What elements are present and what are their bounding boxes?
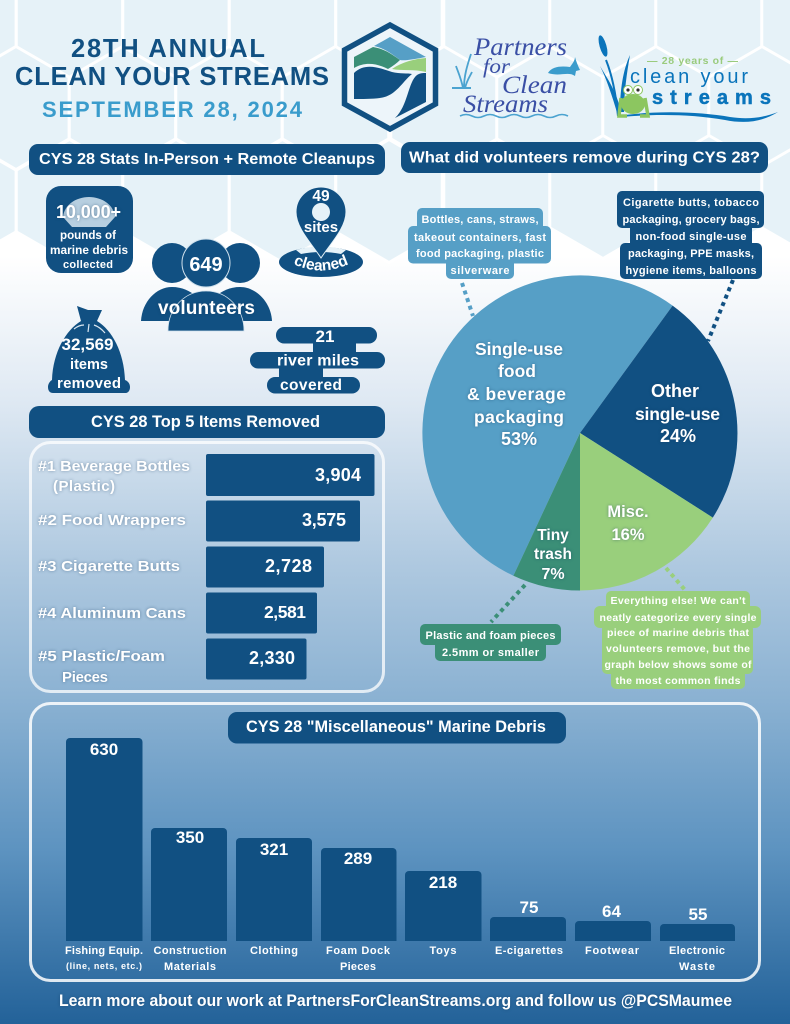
- slice: miscellaneous: [580, 433, 713, 590]
- slice: tiny trash: [513, 433, 580, 590]
- callout: single-use food examples: silverware: [450, 265, 510, 277]
- hexagon background pattern: [0, 0, 790, 262]
- callout: other single-use examples: non-food single-use: [636, 231, 746, 243]
- bar: toys: [405, 871, 482, 957]
- bar: cigarette butts: 2,728: [265, 556, 312, 576]
- logo: 28 years of Clean Your Streams: [597, 34, 778, 122]
- stat: 649 volunteers: [141, 239, 272, 331]
- bar: food wrappers: #2 Food Wrappers: [38, 512, 186, 529]
- bar: footwear: Footwear: [585, 945, 640, 957]
- bar: e-cigarettes: E-cigarettes: [495, 945, 563, 957]
- pie labels: trash: [534, 546, 572, 563]
- bar: foam dock pieces: Foam Dock: [326, 945, 391, 957]
- slice: other single-use: [580, 306, 737, 518]
- bar: clothing: [236, 838, 312, 957]
- pie labels: 53%: [501, 429, 537, 449]
- bar: cigarette butts: [38, 546, 324, 588]
- bar: clothing: 321: [260, 840, 288, 859]
- bar: beverage bottles: #1 Beverage Bottles: [38, 458, 190, 475]
- bar: plastic foam pieces: 2,330: [249, 648, 295, 668]
- stat: 21 river miles covered: 21: [316, 327, 334, 346]
- pie labels: Other: [651, 381, 699, 401]
- callout: single-use food examples: takeout containers, fast: [414, 232, 546, 244]
- callout: single-use food examples: [408, 208, 551, 316]
- title: [15, 35, 329, 122]
- slice: single-use food and beverage packaging: [422, 275, 673, 576]
- callout: single-use food examples: food packaging, plastic: [416, 248, 544, 260]
- icon: hexagon watershed logo: [344, 25, 436, 129]
- stat: 49 sites cleaned: 49: [312, 188, 330, 205]
- callout: miscellaneous description: piece of marine debris that: [607, 627, 750, 639]
- callout: miscellaneous description: [594, 568, 761, 689]
- pie labels: single-use: [635, 404, 720, 424]
- bar: e-cigarettes: [490, 898, 566, 957]
- stat: 21 river miles covered: river miles: [277, 352, 359, 370]
- bar: electronic waste: 55: [689, 905, 707, 924]
- bar: fishing equipment: Fishing Equip.: [65, 945, 143, 957]
- panel: miscellaneous marine debris chart: [30, 704, 760, 980]
- callout: other single-use examples: packaging, grocery bags,: [622, 214, 760, 226]
- bar: clothing: Clothing: [250, 945, 298, 957]
- pie labels: Tiny: [537, 527, 569, 544]
- panel: top 5 bar chart: [30, 442, 384, 692]
- pie labels: [467, 339, 720, 583]
- pie labels: Single-use: [475, 339, 563, 359]
- bar: toys: Toys: [430, 945, 456, 957]
- stat: 21 river miles covered: [250, 327, 385, 394]
- callout: other single-use examples: Cigarette butts, tobacco: [623, 197, 759, 209]
- callout: miscellaneous description: neatly categorize every single: [600, 612, 757, 624]
- bar: aluminum cans: #4 Aluminum Cans: [38, 605, 186, 622]
- bar: fishing equipment: [65, 738, 143, 971]
- logo: 28 years of Clean Your Streams: — 28 years of —: [647, 55, 738, 67]
- stat: 21 river miles covered: covered: [280, 377, 342, 394]
- bar: foam dock pieces: [321, 848, 396, 973]
- callout: single-use food examples: Bottles, cans, straws,: [422, 214, 538, 226]
- logo: Partners for Clean Streams: [452, 34, 580, 118]
- bar: food wrappers: 3,575: [302, 510, 346, 530]
- bar: beverage bottles: 3,904: [315, 465, 361, 485]
- logo: 28 years of Clean Your Streams: clean your: [630, 66, 748, 88]
- callout: miscellaneous description: graph below shows some of: [604, 659, 752, 671]
- callout: miscellaneous description: Everything else! We can't: [610, 595, 746, 607]
- heading: miscellaneous marine debris: CYS 28 "Miscellaneous" Marine Debris: [246, 718, 546, 736]
- stat: 10,000+ pounds: marine debris: [50, 243, 128, 257]
- bar: plastic foam pieces: [38, 638, 306, 686]
- stat: 649 volunteers: volunteers: [158, 298, 255, 319]
- callout: other single-use examples: hygiene items, balloons: [626, 265, 756, 277]
- bar: construction materials: Construction: [154, 945, 227, 957]
- heading: stats: [29, 144, 385, 175]
- title: 28TH ANNUAL: [71, 35, 265, 63]
- stat: 32,569 items removed: [48, 306, 130, 393]
- heading: stats: CYS 28 Stats In-Person + Remote Cleanups: [39, 151, 375, 168]
- bar: plastic foam pieces: Pieces: [62, 669, 108, 686]
- bar: construction materials: [151, 828, 227, 973]
- callout: other single-use examples: packaging, PPE masks,: [628, 248, 754, 260]
- footer: Learn more about our work at PartnersForCleanStreams.org and follow us @PCSMaumee: [59, 992, 732, 1010]
- title: SEPTEMBER 28, 2024: [42, 97, 303, 122]
- pie labels: food: [498, 361, 536, 381]
- stat: 49 sites cleaned: cleaned: [294, 254, 348, 271]
- bar: electronic waste: Electronic: [669, 945, 725, 957]
- callout: tiny trash description: Plastic and foam pieces: [426, 630, 556, 642]
- bar: plastic foam pieces: #5 Plastic/Foam: [38, 648, 165, 665]
- bar: electronic waste: Waste: [679, 961, 715, 973]
- pie chart: [422, 275, 737, 590]
- bar: construction materials: 350: [176, 828, 204, 847]
- heading: what did volunteers remove: [401, 142, 768, 173]
- bar: foam dock pieces: Pieces: [340, 961, 376, 973]
- pie labels: Misc.: [607, 503, 649, 521]
- icon: frog: [619, 86, 648, 116]
- logo: Partners for Clean Streams: for: [483, 54, 511, 78]
- bar: footwear: 64: [602, 902, 621, 921]
- bar: aluminum cans: 2,581: [264, 602, 306, 622]
- bar: foam dock pieces: 289: [344, 849, 372, 868]
- heading: top 5 items: [29, 406, 385, 438]
- stat: 10,000+ pounds: 10,000+: [56, 202, 121, 222]
- stat: 32,569 items removed: removed: [57, 375, 121, 392]
- pie labels: packaging: [474, 407, 564, 427]
- bar: beverage bottles: [38, 454, 374, 496]
- pie labels: & beverage: [467, 384, 566, 404]
- stat: 49 sites cleaned: [279, 188, 363, 277]
- bar: electronic waste: [660, 905, 735, 973]
- bar: e-cigarettes: 75: [520, 898, 538, 917]
- stat: 10,000+ pounds: pounds of: [60, 229, 116, 242]
- callout: tiny trash description: 2.5mm or smaller: [442, 647, 540, 659]
- heading: what did volunteers remove: What did volunteers remove during CYS 28?: [409, 150, 760, 166]
- logo: 28 years of Clean Your Streams: streams: [652, 87, 771, 109]
- title: CLEAN YOUR STREAMS: [15, 63, 329, 91]
- stat: 49 sites cleaned: sites: [304, 219, 338, 236]
- logo: Partners for Clean Streams: Streams: [463, 91, 548, 118]
- pie labels: 16%: [611, 526, 645, 544]
- callout: miscellaneous description: volunteers remove, but the: [606, 643, 750, 655]
- logo: Partners for Clean Streams: Clean: [502, 72, 567, 99]
- stat: 10,000+ pounds: collected: [63, 259, 113, 271]
- stat: 32,569 items removed: 32,569: [62, 335, 114, 354]
- bar: footwear: [575, 902, 651, 957]
- bar: construction materials: Materials: [164, 961, 216, 973]
- bar: fishing equipment: 630: [90, 740, 118, 759]
- bar: food wrappers: [38, 500, 360, 542]
- callout: miscellaneous description: the most common finds: [616, 675, 741, 687]
- logo: Partners for Clean Streams: Partners: [473, 34, 567, 61]
- bar: aluminum cans: [38, 592, 317, 634]
- stat: 32,569 items removed: items: [70, 357, 108, 373]
- callout: tiny trash description: [420, 585, 561, 661]
- stat: 649 volunteers: 649: [189, 254, 223, 276]
- bar: toys: 218: [429, 873, 457, 892]
- pie labels: 7%: [541, 566, 565, 583]
- callout: other single-use examples: [617, 191, 764, 341]
- bar: cigarette butts: #3 Cigarette Butts: [38, 558, 180, 575]
- pie labels: 24%: [660, 426, 696, 446]
- heading: top 5 items: CYS 28 Top 5 Items Removed: [91, 413, 320, 431]
- stat: 10,000+ pounds: [46, 186, 133, 273]
- bar: beverage bottles: (Plastic): [53, 478, 115, 495]
- heading: miscellaneous marine debris: [228, 712, 566, 744]
- bar: fishing equipment: (line, nets, etc.): [66, 961, 142, 971]
